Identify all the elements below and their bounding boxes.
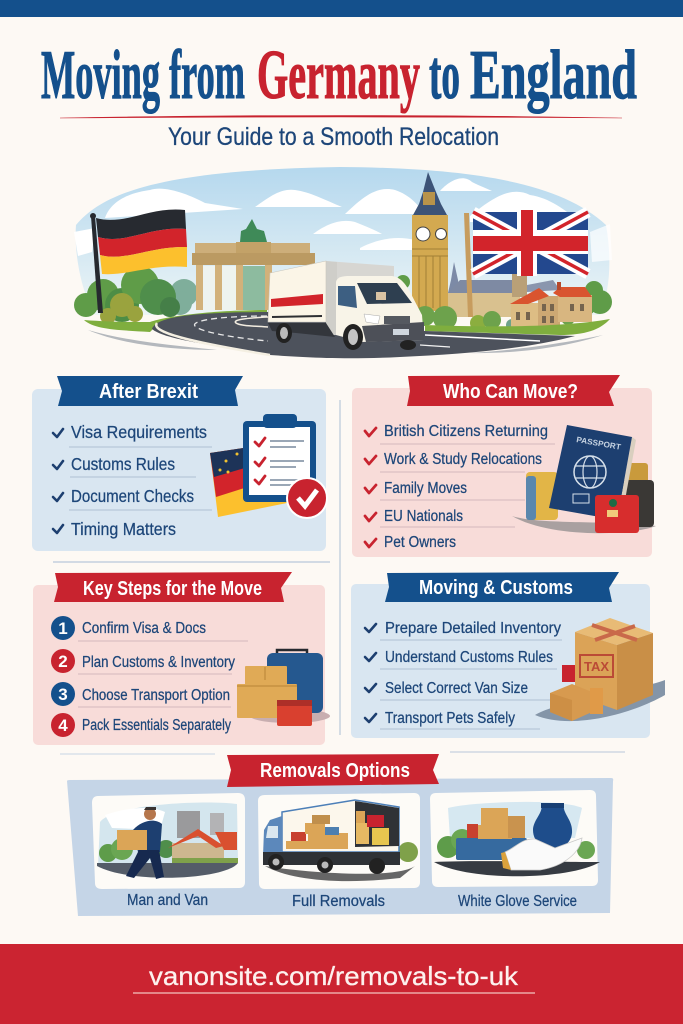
footer url: vanonsite.com/removals-to-uk <box>149 961 519 991</box>
banner: after brexit <box>57 376 243 406</box>
vertical divider <box>339 400 341 735</box>
checklist: after brexit: Visa Requirements <box>71 422 207 442</box>
title underline <box>60 116 622 118</box>
hero illustration <box>74 167 612 358</box>
palace <box>448 262 560 317</box>
panel: removals options <box>67 754 613 916</box>
panel: moving and customs <box>351 572 665 738</box>
houses <box>510 282 592 328</box>
road shadow streaks <box>88 330 603 353</box>
numbered list: Confirm Visa & Docs <box>82 620 206 637</box>
subtitle: Your Guide to a Smooth Relocation <box>168 123 499 151</box>
checklist: who can move: Family Moves <box>384 480 467 497</box>
checklist: who can move: British Citizens Returning <box>384 423 548 440</box>
icon: customs boxes <box>535 618 665 721</box>
checklist: moving and customs: Prepare Detailed Inventory <box>385 620 561 637</box>
checklist: moving and customs: Transport Pets Safely <box>385 710 515 727</box>
banner: key steps: Key Steps for the Move <box>83 578 262 600</box>
clouds <box>74 178 612 300</box>
brandenburg gate <box>192 219 315 310</box>
panel: who can move <box>352 375 656 557</box>
banner: who can move: Who Can Move? <box>443 381 578 403</box>
checklist: who can move: Pet Owners <box>384 534 456 551</box>
icon: passport and luggage <box>512 425 656 533</box>
icon: flag and clipboard <box>210 414 327 518</box>
checklist: after brexit: Customs Rules <box>71 454 175 474</box>
uk flag <box>464 210 588 317</box>
card: full removals <box>258 793 420 889</box>
removal van <box>268 261 424 350</box>
footer underline <box>133 992 535 994</box>
banner: after brexit: After Brexit <box>99 381 198 403</box>
label: Full Removals <box>292 893 385 910</box>
banner: who can move <box>407 375 620 406</box>
numbered list: 2 <box>58 652 68 671</box>
checklist: after brexit: Document Checks <box>71 486 194 506</box>
banner: removals options: Removals Options <box>260 760 410 782</box>
bushes <box>415 306 575 331</box>
grass <box>84 310 610 335</box>
trees left <box>74 266 180 324</box>
divider left <box>60 753 215 755</box>
banner: moving and customs <box>385 572 619 602</box>
divider <box>53 561 330 563</box>
title: Moving from <box>41 37 245 114</box>
numbered list <box>51 616 248 737</box>
top bar <box>0 0 683 17</box>
numbered list: 4 <box>58 716 68 735</box>
panel: after brexit <box>32 376 327 551</box>
numbered list: Plan Customs & Inventory <box>82 654 235 671</box>
panel: key steps <box>33 572 330 745</box>
numbered list: 3 <box>58 685 68 704</box>
checklist: after brexit <box>53 422 212 539</box>
divider right <box>450 751 625 753</box>
checklist: who can move: Work & Study Relocations <box>384 451 542 468</box>
numbered list: Choose Transport Option <box>82 687 230 704</box>
label: Man and Van <box>127 892 208 909</box>
sky <box>76 167 609 315</box>
banner: key steps <box>54 572 292 602</box>
banner: moving and customs: Moving & Customs <box>419 577 573 599</box>
germany flag <box>90 209 187 313</box>
icon: passport and luggage: PASSPORT <box>576 435 622 452</box>
title <box>41 37 637 114</box>
blue background trees <box>168 279 198 315</box>
banner: removals options <box>227 754 439 787</box>
card: white glove service <box>430 790 600 887</box>
big ben <box>412 172 448 311</box>
checklist: after brexit: Timing Matters <box>71 519 176 539</box>
numbered list: 1 <box>58 619 68 638</box>
footer band <box>0 944 683 1024</box>
checklist: moving and customs: Select Correct Van Size <box>385 680 528 697</box>
title: to <box>429 37 460 114</box>
title: Germany <box>257 37 420 114</box>
icon: customs boxes: TAX <box>584 659 609 674</box>
numbered list: Pack Essentials Separately <box>82 717 231 734</box>
card: man and van <box>92 793 245 889</box>
checklist: moving and customs: Understand Customs Rules <box>385 649 553 666</box>
trees right <box>396 275 612 316</box>
checklist: who can move: EU Nationals <box>384 508 463 525</box>
checklist: moving and customs <box>365 620 562 729</box>
checklist: who can move <box>365 423 555 551</box>
label: White Glove Service <box>458 893 577 910</box>
road <box>152 312 575 358</box>
icon: boxes and suitcase <box>237 650 330 726</box>
